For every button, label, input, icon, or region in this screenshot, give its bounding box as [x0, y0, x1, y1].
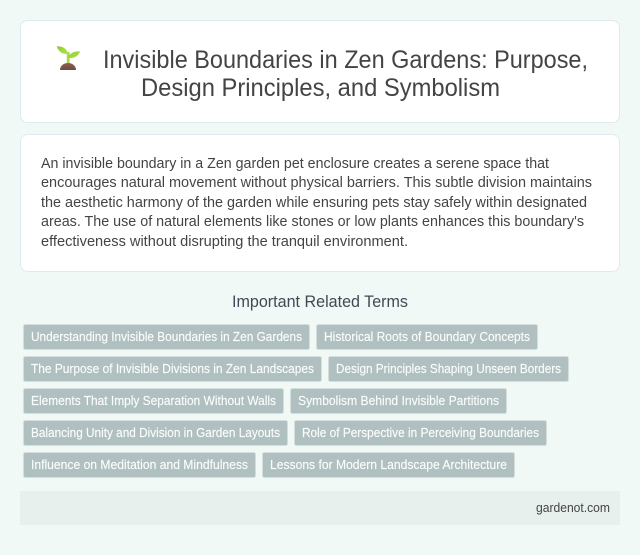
tag: Symbolism Behind Invisible Partitions: [298, 394, 499, 408]
description text: [41, 156, 592, 250]
panel: title card: [20, 20, 620, 122]
tags: related terms: [24, 324, 568, 478]
tag: Understanding Invisible Boundaries in Zen Gardens: [31, 330, 302, 344]
footer: [20, 491, 620, 525]
title: [103, 46, 588, 102]
description text: encourages natural movement without physical barriers. This subtle division maintains: [41, 175, 592, 191]
tag: [24, 324, 310, 350]
tag: The Purpose of Invisible Divisions in Zen Landscapes: [31, 362, 314, 376]
tag: Elements That Imply Separation Without Walls: [31, 394, 276, 408]
tag: [290, 388, 506, 414]
tag: [316, 324, 538, 350]
tag: [24, 388, 284, 414]
tag: Role of Perspective in Perceiving Boundaries: [302, 426, 539, 440]
tag: [294, 420, 546, 446]
tag: [328, 356, 568, 382]
description text: areas. The use of natural elements like stones or low plants enhances this boundary's: [41, 214, 584, 230]
tag: Historical Roots of Boundary Concepts: [324, 330, 530, 344]
tag: [24, 356, 322, 382]
tag: Balancing Unity and Division in Garden Layouts: [31, 426, 280, 440]
tag: [24, 452, 256, 478]
description text: effectiveness without disrupting the tranquil environment.: [41, 234, 408, 250]
tag: Lessons for Modern Landscape Architecture: [270, 458, 507, 472]
description text: the aesthetic harmony of the garden while ensuring pets stay safely within designated: [41, 195, 587, 211]
footer source: gardenot.com: [536, 501, 610, 515]
icon: seedling: [57, 46, 80, 70]
tag: Design Principles Shaping Unseen Borders: [336, 362, 561, 376]
title: Invisible Boundaries in Zen Gardens: Purpose,: [103, 46, 588, 74]
description text: An invisible boundary in a Zen garden pet enclosure creates a serene space that: [41, 156, 549, 172]
tag: [24, 420, 288, 446]
heading: related terms: Important Related Terms: [232, 293, 408, 311]
tag: [262, 452, 514, 478]
title: Design Principles, and Symbolism: [141, 74, 500, 102]
panel: description: [20, 134, 620, 272]
tag: Influence on Meditation and Mindfulness: [31, 458, 248, 472]
